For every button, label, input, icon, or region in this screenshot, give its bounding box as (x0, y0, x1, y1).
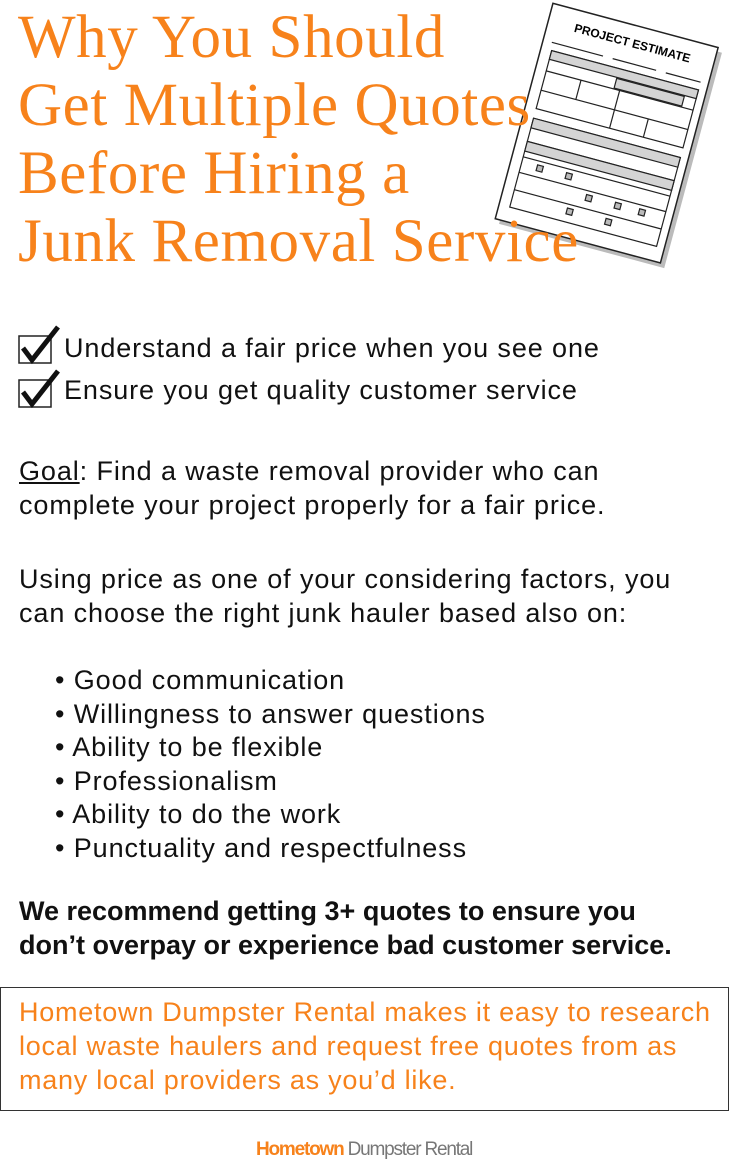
callout box: Hometown Dumpster Rental makes it easy to research (19, 997, 711, 1027)
title: Why You Should (18, 4, 445, 71)
title: Junk Removal Service (18, 208, 579, 275)
callout box: many local providers as you’d like. (19, 1065, 456, 1095)
callout box (0, 987, 729, 1111)
bullet list: • Good communication (55, 665, 345, 695)
recommendation: don’t overpay or experience bad customer service. (19, 930, 672, 960)
bullet list (55, 665, 486, 863)
bullet list: • Ability to do the work (55, 799, 341, 829)
intro text: can choose the right junk hauler based also on: (19, 598, 627, 628)
intro text (19, 564, 671, 628)
checklist item 1: Understand a fair price when you see one (64, 333, 600, 363)
title (18, 4, 579, 275)
intro text: Using price as one of your considering factors, you (19, 564, 671, 594)
goal text: Goal: Find a waste removal provider who can (19, 456, 599, 486)
title: Before Hiring a (18, 140, 410, 207)
goal text: complete your project properly for a fair price. (19, 490, 605, 520)
icon: checkbox (18, 370, 60, 408)
goal text (19, 456, 605, 520)
title: Get Multiple Quotes (18, 72, 531, 139)
illustration: project estimate document (494, 2, 722, 268)
icon: checkbox (18, 326, 60, 364)
illustration: project estimate document: PROJECT ESTIMATE (573, 21, 692, 65)
checklist (18, 326, 600, 408)
bullet list: • Punctuality and respectfulness (55, 833, 467, 863)
bullet list: • Ability to be flexible (55, 732, 323, 762)
recommendation (19, 896, 672, 960)
recommendation: We recommend getting 3+ quotes to ensure you (19, 896, 636, 926)
checklist item 2: Ensure you get quality customer service (64, 375, 578, 405)
bullet list: • Professionalism (55, 766, 278, 796)
logo: Hometown Dumpster Rental (256, 1139, 472, 1160)
callout box: local waste haulers and request free quotes from as (19, 1031, 677, 1061)
bullet list: • Willingness to answer questions (55, 699, 486, 729)
